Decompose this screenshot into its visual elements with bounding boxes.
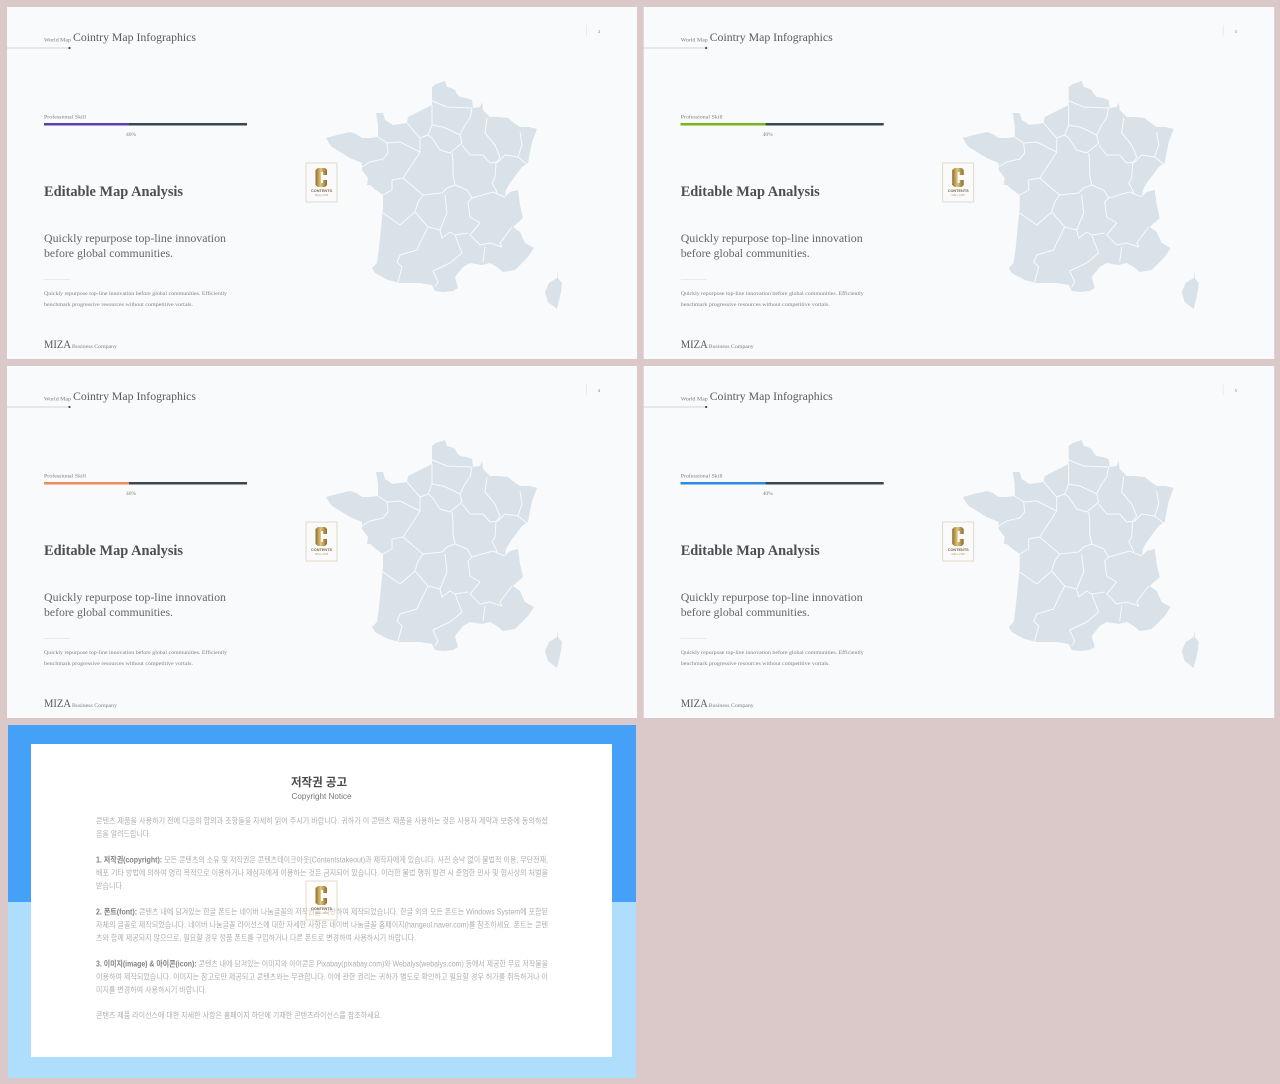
copyright body: 받습니다.: [96, 880, 124, 890]
panel: slide 4 orange: [7, 366, 637, 718]
panel: copyright notice: [8, 725, 636, 1078]
page number: [586, 384, 601, 395]
panel: slide 2 purple: [7, 7, 637, 359]
header: [7, 30, 196, 49]
logo: MALL.COM: [315, 194, 328, 197]
progress bar: 40%: 40%: [126, 491, 136, 497]
logo: CONTENTS: [311, 189, 332, 193]
copyright body: 츠와 함께 제공되지 않으므로, 필요할 경우 정품 폰트를 구입하거나 다른 폰트로 변경하여 사용하시기 바랍니다.: [96, 932, 416, 942]
header: [7, 389, 196, 408]
footer brand: [681, 337, 754, 351]
header: [644, 389, 833, 408]
map of France: [326, 81, 562, 309]
body text: [44, 280, 227, 308]
page number: 2: [598, 29, 600, 34]
progress bar: 40%: 40%: [763, 491, 773, 497]
copyright body: 콘텐츠 제품 라이선스에 대한 자세한 사항은 홈페이지 하단에 기재한 콘텐츠라이선스를 참조하세요.: [96, 1010, 382, 1020]
progress bar: 40%: 40%: [126, 132, 136, 138]
subheading: before global communities.: [44, 246, 173, 260]
footer brand: Business Company: [72, 703, 117, 709]
map of France: [326, 440, 562, 668]
logo: [306, 881, 337, 920]
copyright body: [96, 816, 549, 1020]
body text: benchmark progressive resources without competitive vortals.: [681, 661, 830, 667]
copyright body: 이용하여 제작되었습니다. 이미지는 참고로만 제공되고 콘텐츠와는 무관합니다. 이에 관한 권리는 귀하가 별도로 확인하고 필요할 경우 허가를 취득하거나 이: [96, 972, 548, 982]
subheading: Quickly repurpose top-line innovation: [681, 590, 863, 604]
body text: benchmark progressive resources without competitive vortals.: [44, 302, 194, 308]
body text: Quickly repurpose top-line innovation before global communities. Efficiently: [681, 649, 864, 656]
footer brand: MIZA: [681, 337, 708, 351]
footer brand: MIZA: [44, 337, 71, 351]
footer brand: MIZA: [44, 696, 71, 710]
subheading: Quickly repurpose top-line innovation: [44, 590, 226, 604]
copyright body: 1. 저작권(copyright): 모든 콘텐츠의 소유 및 저작권은 콘텐츠테이크아웃(Contentstakeout)과 제작자에게 있습니다. 사전 승낙 없이 불법적 이용, 무단전재,: [96, 854, 548, 864]
body text: [681, 638, 864, 667]
footer brand: [44, 337, 117, 351]
copyright body: 3. 이미지(image) & 아이콘(icon): 콘텐츠 내에 담겨있는 이미지와 아이콘은 Pixabay(pixabay.com)와 Webalys(webalys.com) 등에서 제공한 무료 저작물을: [96, 958, 548, 968]
logo: MALL.COM: [952, 194, 965, 197]
page number: [1223, 384, 1238, 395]
subheading: Quickly repurpose top-line innovation: [681, 231, 863, 245]
panel: slide 3 green: [644, 7, 1274, 359]
subheading: [44, 231, 226, 260]
heading: Editable Map Analysis: [681, 184, 820, 200]
page number: 3: [1235, 29, 1238, 34]
header: World Map: [44, 38, 71, 44]
body text: Quickly repurpose top-line innovation before global communities. Efficiently: [44, 649, 227, 656]
footer brand: [681, 696, 754, 710]
copyright body: 음을 알려드립니다.: [96, 828, 151, 838]
logo: [306, 163, 337, 202]
subheading: [681, 231, 863, 260]
footer brand: Business Company: [709, 344, 754, 350]
body text: benchmark progressive resources without competitive vortals.: [44, 661, 194, 667]
subheading: before global communities.: [44, 605, 173, 619]
copyright body: 미지를 변경하여 사용하시기 바랍니다.: [96, 984, 207, 994]
header: Cointry Map Infographics: [710, 30, 833, 44]
footer brand: MIZA: [681, 696, 708, 710]
page number: 5: [1235, 388, 1238, 393]
map of France: [963, 440, 1199, 668]
body text: [44, 638, 227, 667]
heading: Editable Map Analysis: [44, 543, 183, 559]
body text: Quickly repurpose top-line innovation before global communities. Efficiently: [681, 290, 864, 297]
header: [644, 30, 833, 49]
header: Cointry Map Infographics: [710, 389, 833, 403]
header: World Map: [44, 396, 71, 402]
header: Cointry Map Infographics: [73, 30, 196, 44]
progress bar: 40%: Professional Skill: [681, 472, 723, 480]
body text: [681, 280, 864, 308]
copyright title: 저작권 공고: [291, 775, 347, 789]
progress bar: 40%: [681, 114, 884, 138]
body text: benchmark progressive resources without competitive vortals.: [681, 302, 830, 308]
panel: slide 5 blue: [644, 366, 1274, 718]
subheading: before global communities.: [681, 605, 810, 619]
footer brand: Business Company: [72, 344, 117, 350]
page number: [586, 25, 600, 36]
progress bar: 40%: Professional Skill: [44, 114, 86, 120]
page number: [1223, 25, 1238, 36]
header: World Map: [681, 396, 708, 402]
copyright title: Copyright Notice: [292, 791, 352, 801]
copyright body: 배포 기타 방법에 의하여 영리 목적으로 이용하거나 제삼자에게 이용하는 것은 금지되어 있습니다. 이러한 불법 행위 발견 시 준엄한 민사 및 형사상의 처벌을: [96, 868, 548, 878]
page number: 4: [598, 388, 601, 393]
heading: Editable Map Analysis: [681, 543, 820, 559]
subheading: before global communities.: [681, 246, 810, 260]
footer brand: Business Company: [709, 703, 754, 709]
copyright title: [291, 775, 352, 801]
progress bar: 40%: [44, 114, 247, 138]
logo: [306, 522, 337, 561]
subheading: Quickly repurpose top-line innovation: [44, 231, 226, 245]
subheading: [44, 590, 226, 619]
progress bar: 40%: [681, 472, 884, 497]
map of France: [963, 81, 1199, 309]
footer brand: [44, 696, 117, 710]
logo: CONTENTS: [311, 907, 332, 911]
header: Cointry Map Infographics: [73, 389, 196, 403]
subheading: [681, 590, 863, 619]
progress bar: 40%: [44, 472, 247, 497]
progress bar: 40%: Professional Skill: [681, 114, 723, 120]
logo: CONTENTS: [948, 548, 969, 552]
logo: MALL.COM: [315, 553, 328, 556]
copyright body: 콘텐츠 제품을 사용하기 전에 다음의 합의과 조항들을 자세히 읽어 주시기 바랍니다. 귀하가 이 콘텐츠 제품을 사용하는 것은 사용자 계약과 보증에 동의하셨: [96, 816, 549, 826]
body text: Quickly repurpose top-line innovation before global communities. Efficiently: [44, 290, 227, 297]
logo: MALL.COM: [315, 912, 328, 915]
logo: MALL.COM: [952, 553, 965, 556]
progress bar: 40%: 40%: [763, 132, 773, 138]
heading: Editable Map Analysis: [44, 184, 183, 200]
logo: CONTENTS: [311, 548, 332, 552]
logo: CONTENTS: [948, 189, 969, 193]
logo: [943, 522, 974, 561]
header: World Map: [681, 38, 708, 44]
copyright body: 2. 폰트(font): 콘텐츠 내에 담겨있는 한글 폰트는 네이버 나눔글꼴의 저작권을 기반하여 제작되었습니다. 한글 외의 모든 폰트는 Windows System에 포함된: [96, 906, 548, 916]
copyright body: 자체의 글꼴로 제작되었습니다. 네이버 나눔글꼴 라이선스에 대한 자세한 사항은 네이버 나눔글꼴 홈페이지(hangeul.naver.com)를 참조하세요. 폰트는 콘텐: [96, 920, 548, 930]
progress bar: 40%: Professional Skill: [44, 472, 86, 480]
logo: [943, 163, 974, 202]
